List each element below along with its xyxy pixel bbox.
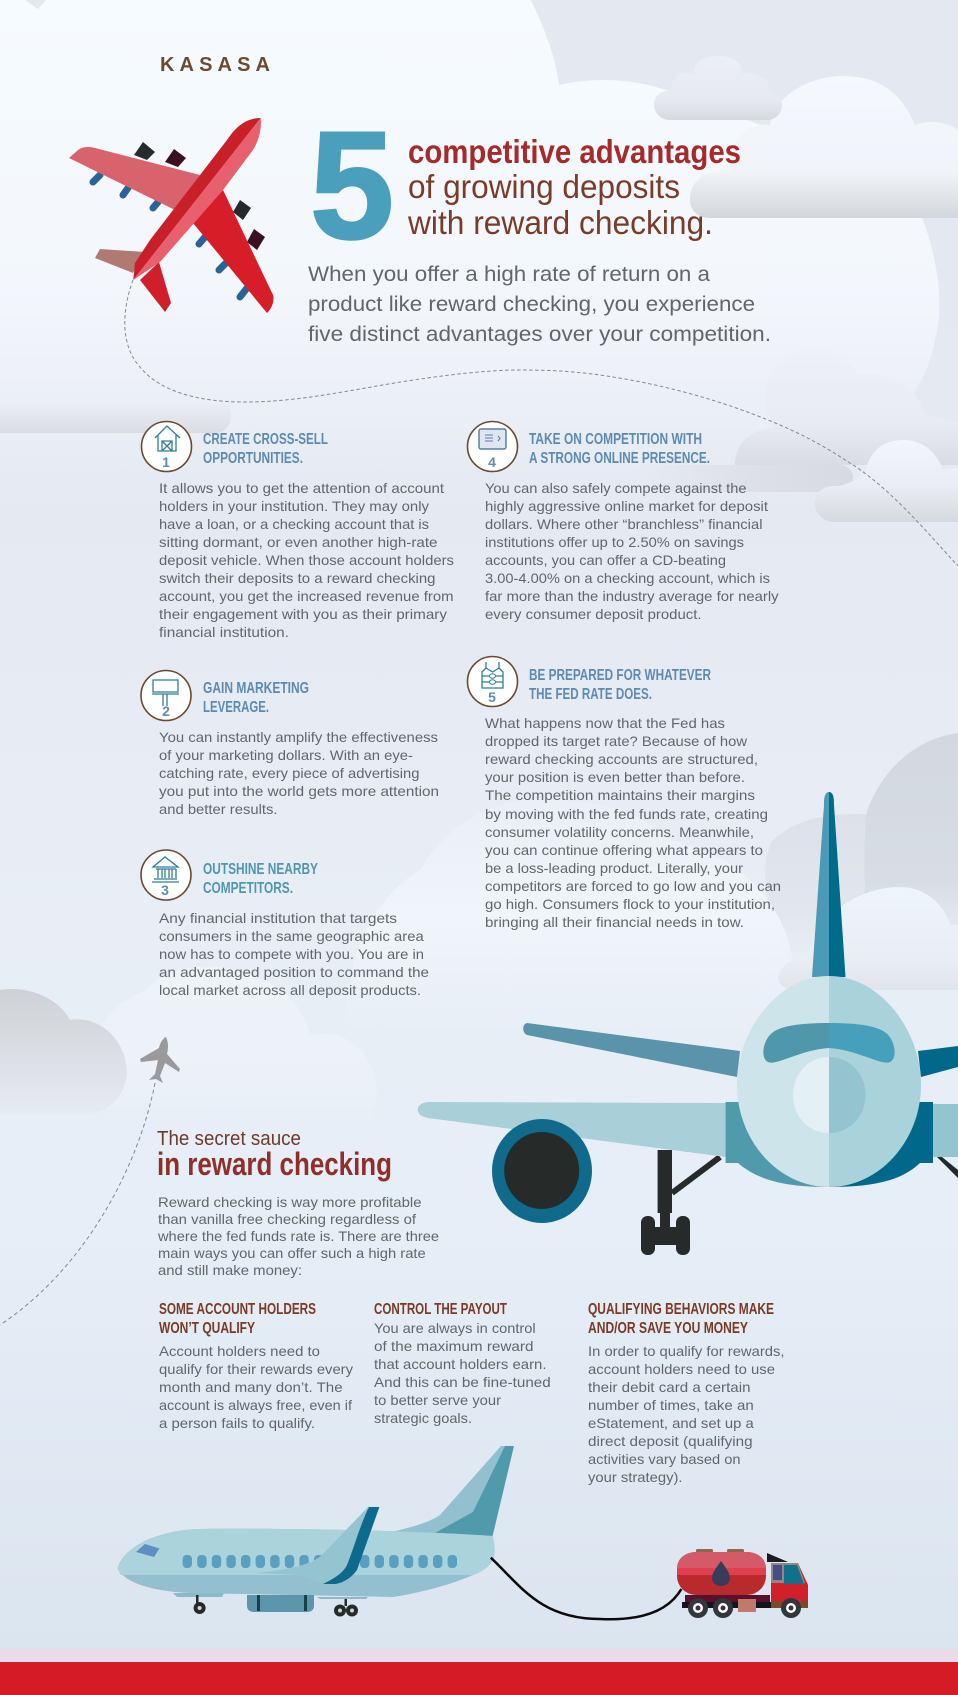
body text: highly aggressive online market for deposit: [485, 499, 768, 514]
column: some account holders: month and many don’t. The: [159, 1380, 343, 1395]
body text: You can instantly amplify the effectiveness: [159, 730, 438, 745]
panel: advantage 4: [468, 422, 779, 622]
column: qualifying behaviors: account holders need to use: [588, 1362, 775, 1377]
icon: bank 3: 3: [161, 882, 169, 898]
body text: [485, 716, 781, 930]
icon: browser safe 4: 4: [488, 454, 496, 470]
intro text: than vanilla free checking regardless of: [158, 1212, 416, 1227]
body text: It allows you to get the attention of account: [159, 481, 444, 496]
body text: consumer volatility concerns. Meanwhile,: [485, 825, 754, 840]
body text: financial institution.: [159, 625, 289, 640]
logo: Kasasa: KASASA: [160, 54, 270, 76]
intro text: [157, 1195, 439, 1278]
icon: life vest 5: [468, 656, 518, 706]
body text: account, you get the increased revenue from: [159, 589, 454, 604]
heading: [203, 680, 309, 716]
body text: by moving with the fed funds rate, creating: [485, 807, 768, 822]
column: control the payout: to better serve your: [374, 1393, 501, 1408]
icon: bank 3: [141, 850, 191, 900]
dashed flight path: small plane: [0, 1083, 155, 1325]
column: control the payout: of the maximum reward: [374, 1339, 534, 1354]
heading: THE FED RATE DOES.: [529, 686, 652, 703]
title line 2: of growing deposits: [408, 168, 680, 205]
title line 3: with reward checking.: [407, 204, 713, 241]
body text: sitting dormant, or even another high-rate: [159, 535, 438, 550]
footer band: [0, 1648, 958, 1695]
heading: TAKE ON COMPETITION WITH: [529, 431, 702, 448]
column: qualifying behaviors: direct deposit (qualifying: [588, 1434, 753, 1449]
heading: [529, 667, 711, 703]
icon: life vest 5: 5: [488, 689, 496, 705]
body text: and better results.: [159, 802, 278, 817]
body text: your position is even better than before.: [485, 770, 745, 785]
column: some account holders: SOME ACCOUNT HOLDERS: [159, 1301, 316, 1318]
body text: have a loan, or a checking account that is: [159, 517, 429, 532]
body text: deposit vehicle. When those account holders: [159, 553, 454, 568]
intro paragraph: [308, 263, 771, 346]
column: some account holders: qualify for their rewards every: [159, 1362, 353, 1377]
body text: you can continue offering what appears to: [485, 843, 763, 858]
icon: browser safe 4: [468, 422, 518, 472]
heading: OPPORTUNITIES.: [203, 450, 303, 467]
background clouds: [0, 0, 958, 1145]
illustration: red plane flying: [69, 118, 273, 313]
heading: OUTSHINE NEARBY: [203, 861, 318, 878]
panel: secret sauce: [157, 1128, 784, 1485]
column: qualifying behaviors: number of times, take an: [588, 1398, 754, 1413]
body text: You can also safely compete against the: [485, 481, 747, 496]
body text: of your marketing dollars. With an eye-: [159, 748, 413, 763]
intro text: main ways you can offer such a high rate: [158, 1246, 426, 1261]
panel: advantage 2: [141, 670, 439, 817]
heading: LEVERAGE.: [203, 699, 269, 716]
column: some account holders: account is always free, even if: [159, 1398, 352, 1413]
column: qualifying behaviors: In order to qualify for rewards,: [588, 1344, 784, 1359]
body text: holders in your institution. They may only: [159, 499, 429, 514]
body text: far more than the industry average for nearly: [485, 589, 779, 604]
body text: What happens now that the Fed has: [485, 716, 725, 731]
column: control the payout: [374, 1301, 551, 1426]
body text: their engagement with you as their primary: [159, 607, 447, 622]
heading: [203, 431, 328, 467]
column: control the payout: that account holders earn.: [374, 1357, 546, 1372]
column: some account holders: a person fails to qualify.: [159, 1416, 315, 1431]
heading: CREATE CROSS-SELL: [203, 431, 328, 448]
intro paragraph: product like reward checking, you experience: [308, 293, 755, 316]
body text: you put into the world gets more attention: [159, 784, 439, 799]
column: control the payout: And this can be fine-tuned: [374, 1375, 551, 1390]
column: some account holders: [159, 1301, 353, 1431]
body text: reward checking accounts are structured,: [485, 752, 758, 767]
body text: [159, 481, 454, 640]
intro paragraph: five distinct advantages over your competition.: [308, 323, 771, 346]
title block: [310, 100, 741, 271]
body text: dropped its target rate? Because of how: [485, 734, 747, 749]
intro paragraph: When you offer a high rate of return on a: [308, 263, 710, 286]
intro text: Reward checking is way more profitable: [158, 1195, 422, 1210]
column: qualifying behaviors: eStatement, and set up a: [588, 1416, 754, 1431]
body text: consumers in the same geographic area: [159, 929, 424, 944]
body text: an advantaged position to command the: [159, 965, 429, 980]
heading: [529, 431, 710, 467]
body text: competitors are forced to go low and you can: [485, 879, 781, 894]
column: some account holders: Account holders need to: [159, 1344, 320, 1359]
icon: billboard 2: 2: [162, 703, 170, 719]
body text: The competition maintains their margins: [485, 788, 755, 803]
column: qualifying behaviors: your strategy).: [588, 1470, 682, 1485]
icon: small grey plane: [140, 1037, 180, 1083]
body text: dollars. Where other “branchless” financial: [485, 517, 762, 532]
column: qualifying behaviors: their debit card a certain: [588, 1380, 750, 1395]
column: qualifying behaviors: AND/OR SAVE YOU MONEY: [588, 1320, 748, 1337]
illustration: large plane front view: [418, 792, 958, 1255]
body text: bringing all their financial needs in tow.: [485, 915, 744, 930]
column: some account holders: WON’T QUALIFY: [159, 1320, 255, 1337]
heading: GAIN MARKETING: [203, 680, 309, 697]
body text: switch their deposits to a reward checking: [159, 571, 436, 586]
body text: [159, 730, 439, 817]
body text: catching rate, every piece of advertising: [159, 766, 420, 781]
body text: [159, 911, 429, 998]
body text: accounts, you can offer a CD-beating: [485, 553, 726, 568]
body text: local market across all deposit products.: [159, 983, 421, 998]
column: control the payout: You are always in control: [374, 1321, 536, 1336]
heading: BE PREPARED FOR WHATEVER: [529, 667, 711, 684]
illustration: fuel truck: [677, 1549, 808, 1618]
body text: every consumer deposit product.: [485, 607, 702, 622]
panel: advantage 5: [468, 656, 781, 930]
panel: advantage 3: [141, 850, 429, 998]
body text: Any financial institution that targets: [159, 911, 397, 926]
heading: The secret sauce: [157, 1128, 301, 1150]
icon: billboard 2: [141, 670, 191, 720]
heading: COMPETITORS.: [203, 880, 293, 897]
icon: house 1: [142, 422, 192, 472]
body text: now has to compete with you. You are in: [159, 947, 424, 962]
intro text: and still make money:: [158, 1263, 302, 1278]
body text: go high. Consumers flock to your institution,: [485, 897, 775, 912]
title line 1: competitive advantages: [408, 133, 741, 170]
icon: house 1: 1: [162, 454, 170, 470]
column: control the payout: CONTROL THE PAYOUT: [374, 1301, 507, 1318]
column: qualifying behaviors: [588, 1301, 784, 1485]
body text: 3.00-4.00% on a checking account, which is: [485, 571, 770, 586]
illustration: side-view plane: [118, 1446, 514, 1616]
body text: be a loss-leading product. Literally, your: [485, 861, 743, 876]
big numeral 5: 5: [310, 100, 394, 271]
heading: A STRONG ONLINE PRESENCE.: [529, 450, 710, 467]
dashed flight path: top: [125, 280, 958, 566]
column: qualifying behaviors: QUALIFYING BEHAVIORS MAKE: [588, 1301, 774, 1318]
column: control the payout: strategic goals.: [374, 1411, 472, 1426]
fuel hose: [491, 1558, 681, 1619]
heading: [203, 861, 318, 897]
column: qualifying behaviors: activities vary based on: [588, 1452, 741, 1467]
heading: in reward checking: [157, 1146, 392, 1182]
heading: [157, 1128, 392, 1182]
body text: [485, 481, 779, 622]
panel: advantage 1: [142, 422, 454, 640]
body text: institutions offer up to 2.50% on savings: [485, 535, 744, 550]
intro text: where the fed funds rate is. There are three: [157, 1229, 439, 1244]
